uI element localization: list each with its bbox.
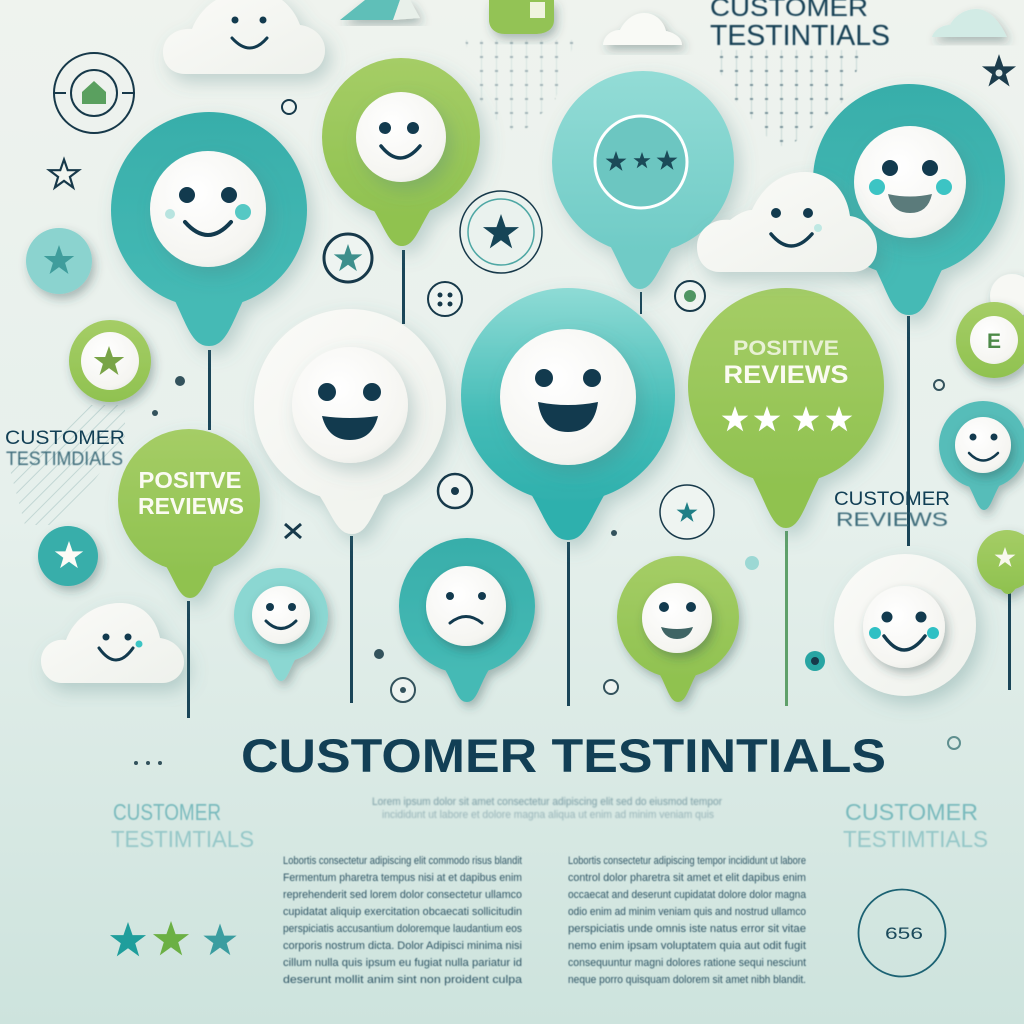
side label: customer testimonials left (111, 799, 254, 852)
number badge: 656 (885, 924, 923, 943)
icon: star ring lower (660, 485, 714, 539)
text block: right column: consequuntur magni dolores ratione sequi nesciunt (568, 957, 806, 969)
heading: left customer testimonials: TESTIMDIALS (6, 449, 123, 470)
side label: customer testimonials left: CUSTOMER (113, 799, 221, 825)
heading: left customer testimonials (5, 428, 125, 470)
text block: left column: cillum nulla quis ipsum eu fugiat nulla pariatur id (283, 957, 522, 969)
badge: green star (69, 320, 151, 402)
cloud: lower left (41, 603, 184, 683)
bubble: teal smiley centre (461, 288, 675, 540)
badge: green right edge: E (987, 330, 1001, 353)
bubble: green smiley top (322, 58, 480, 246)
icon: outline star left (49, 160, 79, 188)
label: positive reviews (724, 337, 848, 389)
text block: left column (283, 855, 523, 986)
bubble: white smiley centre left (254, 309, 446, 534)
badge: green pin right edge (977, 530, 1024, 594)
text block: left column: reprehenderit sed lorem dolor consectetur ullamco (283, 889, 522, 901)
cloud: right with smiley (697, 172, 877, 272)
bubble: light teal star rating (552, 71, 734, 289)
dot grid: top centre (465, 40, 575, 130)
text block: right column: perspiciatis unde omnis iste natus error sit vitae (568, 923, 806, 935)
heading: right customer reviews: REVIEWS (836, 510, 948, 531)
icon: target top left (53, 53, 135, 133)
label: positive reviews small (138, 467, 244, 519)
text block: right column: nemo enim ipsam voluptatem quia aut odit fugit (568, 940, 806, 952)
heading: right customer reviews: CUSTOMER (834, 489, 950, 510)
text block: left column: deserunt mollit anim sint non proident culpa (283, 974, 523, 986)
icon: dark star top right (984, 56, 1014, 85)
side label: customer testimonials right: CUSTOMER (845, 799, 978, 825)
badge: green right edge (956, 274, 1024, 378)
badge: light teal star (26, 228, 92, 294)
bubble: light teal smiley small (234, 568, 328, 681)
subtitle blurred: incididunt ut labore et dolore magna aliqua ut enim ad minim veniam quis (382, 809, 714, 821)
text block: right column: Lobortis consectetur adipiscing tempor incididunt ut labore (568, 855, 806, 867)
text block: left column: Lobortis consectetur adipiscing elit commodo risus blandit (283, 855, 522, 867)
label: positive reviews small: REVIEWS (138, 493, 244, 519)
label: positive reviews small: POSITVE (138, 467, 242, 493)
icon: star ring large (460, 191, 542, 273)
cloud: small top centre (603, 13, 682, 45)
text block: right column (568, 855, 807, 986)
label: positive reviews: POSITIVE (733, 337, 839, 360)
small dots near title (134, 737, 960, 765)
text block: right column: control dolor pharetra sit amet et elit dapibus enim (568, 872, 806, 884)
side label: customer testimonials right: TESTIMTIALS (843, 826, 988, 852)
badge: teal star (38, 526, 98, 586)
bubble: light teal smiley right edge (939, 401, 1024, 510)
label: positive reviews: REVIEWS (724, 361, 848, 389)
title: CUSTOMER TESTINTIALS (241, 729, 886, 782)
text block: left column: cupidatat aliquip exercitation obcaecati sollicitudin (283, 906, 522, 918)
text block: right column: occaecat and deserunt cupidatat dolore dolor magna (568, 889, 807, 901)
bubble: green smiley lower (617, 556, 739, 702)
heading: top right customer testimonials (710, 0, 890, 52)
hatch pattern: left (10, 405, 125, 525)
icon: small rings and dots (152, 100, 944, 702)
icon: star ring small (324, 234, 372, 282)
stems (187, 250, 1011, 718)
text block: right column: neque porro quisquam dolorem sit amet nibh blandit. (568, 974, 806, 986)
bubble: teal smiley top left (111, 112, 307, 346)
shape: teal pin top (340, 0, 420, 20)
subtitle blurred: Lorem ipsum dolor sit amet consectetur adipiscing elit sed do eiusmod tempor (372, 796, 722, 808)
text block: right column: odio enim ad minim veniam quis and nostrud ullamco (568, 906, 806, 918)
shape: green pin top (489, 0, 554, 34)
bubble: green positive reviews small (118, 429, 260, 598)
number badge (858, 890, 946, 976)
side label: customer testimonials left: TESTIMTIALS (111, 826, 254, 852)
rating stars bottom left (110, 921, 237, 956)
text block: left column: Fermentum pharetra tempus nisi at et dapibus enim (283, 872, 522, 884)
text block: left column: corporis nostrum dicta. Dolor Adipisci minima nisi (283, 940, 522, 952)
subtitle blurred (372, 796, 722, 821)
heading: right customer reviews (834, 489, 950, 531)
side label: customer testimonials right (843, 799, 988, 852)
bubble: green positive reviews large (688, 288, 884, 528)
bubble: white smiley lower right (834, 554, 976, 696)
heading: top right customer testimonials: TESTINTIALS (710, 20, 890, 52)
dot grid: top right (708, 50, 865, 146)
cloud: small top right (932, 9, 1007, 37)
heading: left customer testimonials: CUSTOMER (5, 428, 125, 449)
bubble: teal smiley top right (813, 84, 1005, 315)
cloud: top left (163, 0, 325, 74)
text block: left column: perspiciatis accusantium doloremque laudantium eos (283, 923, 522, 935)
bubble: teal neutral face (399, 538, 535, 702)
